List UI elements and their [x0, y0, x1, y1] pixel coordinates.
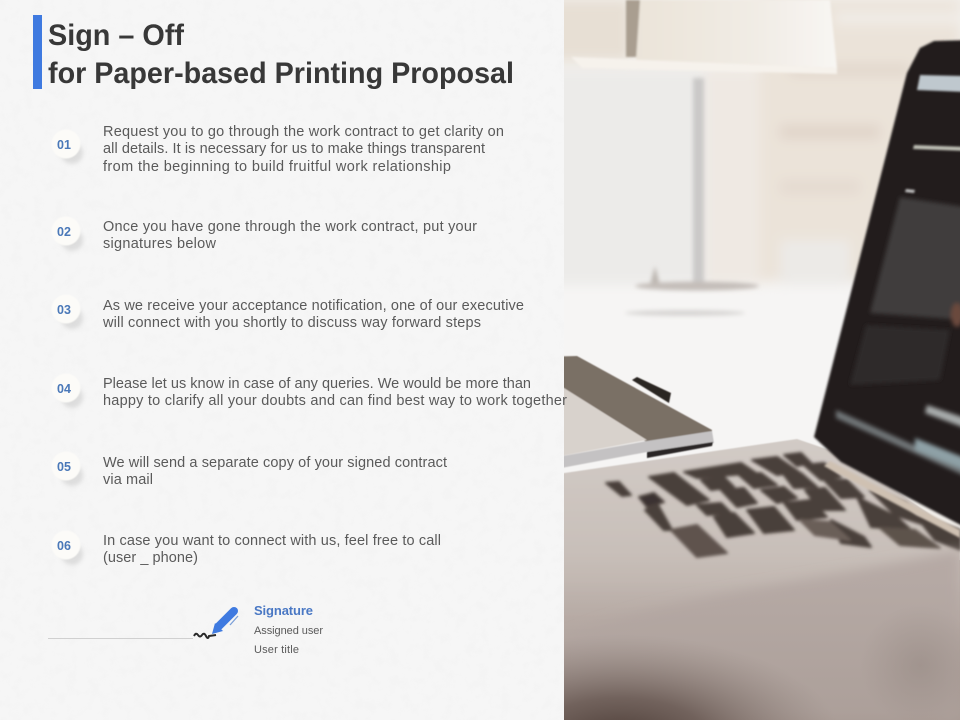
title: for Paper-based Printing Proposal	[48, 57, 514, 90]
item 03: 03	[57, 303, 71, 317]
item 04: 04	[57, 382, 71, 396]
lamp	[571, 0, 837, 74]
item 06: 06	[57, 539, 71, 553]
item 02: Once you have gone through the work contract, put your	[103, 219, 477, 235]
item 03: will connect with you shortly to discuss way forward steps	[102, 315, 481, 331]
item 02	[52, 216, 477, 252]
item 06: In case you want to connect with us, feel free to call	[103, 533, 441, 549]
keyboard	[606, 453, 960, 557]
title: Sign – Off	[48, 19, 185, 52]
wall shading	[564, 0, 960, 472]
signature line	[48, 638, 193, 639]
lamp stem and base	[625, 78, 759, 316]
item 01	[52, 124, 504, 175]
signature block: User title	[254, 644, 299, 656]
signature block	[254, 603, 323, 656]
item 04: Please let us know in case of any queries. We would be more than	[103, 376, 531, 392]
title accent bar	[33, 15, 42, 89]
item 06	[52, 530, 441, 566]
item 05	[52, 452, 447, 488]
laptop screen	[814, 40, 960, 530]
laptop base	[530, 439, 960, 720]
title	[48, 19, 514, 90]
photo: laptop and tablet on desk	[520, 0, 960, 720]
paper background panel	[0, 0, 564, 720]
tablet and stylus	[564, 355, 714, 468]
signature block: Assigned user	[254, 625, 323, 637]
item 05: We will send a separate copy of your signed contract	[103, 455, 447, 471]
item 02: signatures below	[103, 236, 217, 252]
item 01: from the beginning to build fruitful work relationship	[103, 159, 451, 175]
item 02: 02	[57, 225, 71, 239]
item 05: 05	[57, 460, 71, 474]
signature block: Signature	[254, 603, 313, 618]
item 01: all details. It is necessary for us to make things transparent	[103, 141, 485, 157]
item 04	[52, 374, 567, 409]
item 01: 01	[57, 138, 71, 152]
item 05: via mail	[103, 472, 153, 488]
blurred hand	[564, 550, 960, 720]
item 03: As we receive your acceptance notification, one of our executive	[103, 298, 524, 314]
item 01: Request you to go through the work contract to get clarity on	[103, 124, 504, 140]
item 03	[52, 294, 524, 331]
laptop front edge glare	[824, 461, 960, 538]
item 06: (user _ phone)	[103, 550, 198, 566]
item 04: happy to clarify all your doubts and can find best way to work together	[103, 393, 567, 409]
icon: pen with squiggle	[194, 611, 238, 638]
